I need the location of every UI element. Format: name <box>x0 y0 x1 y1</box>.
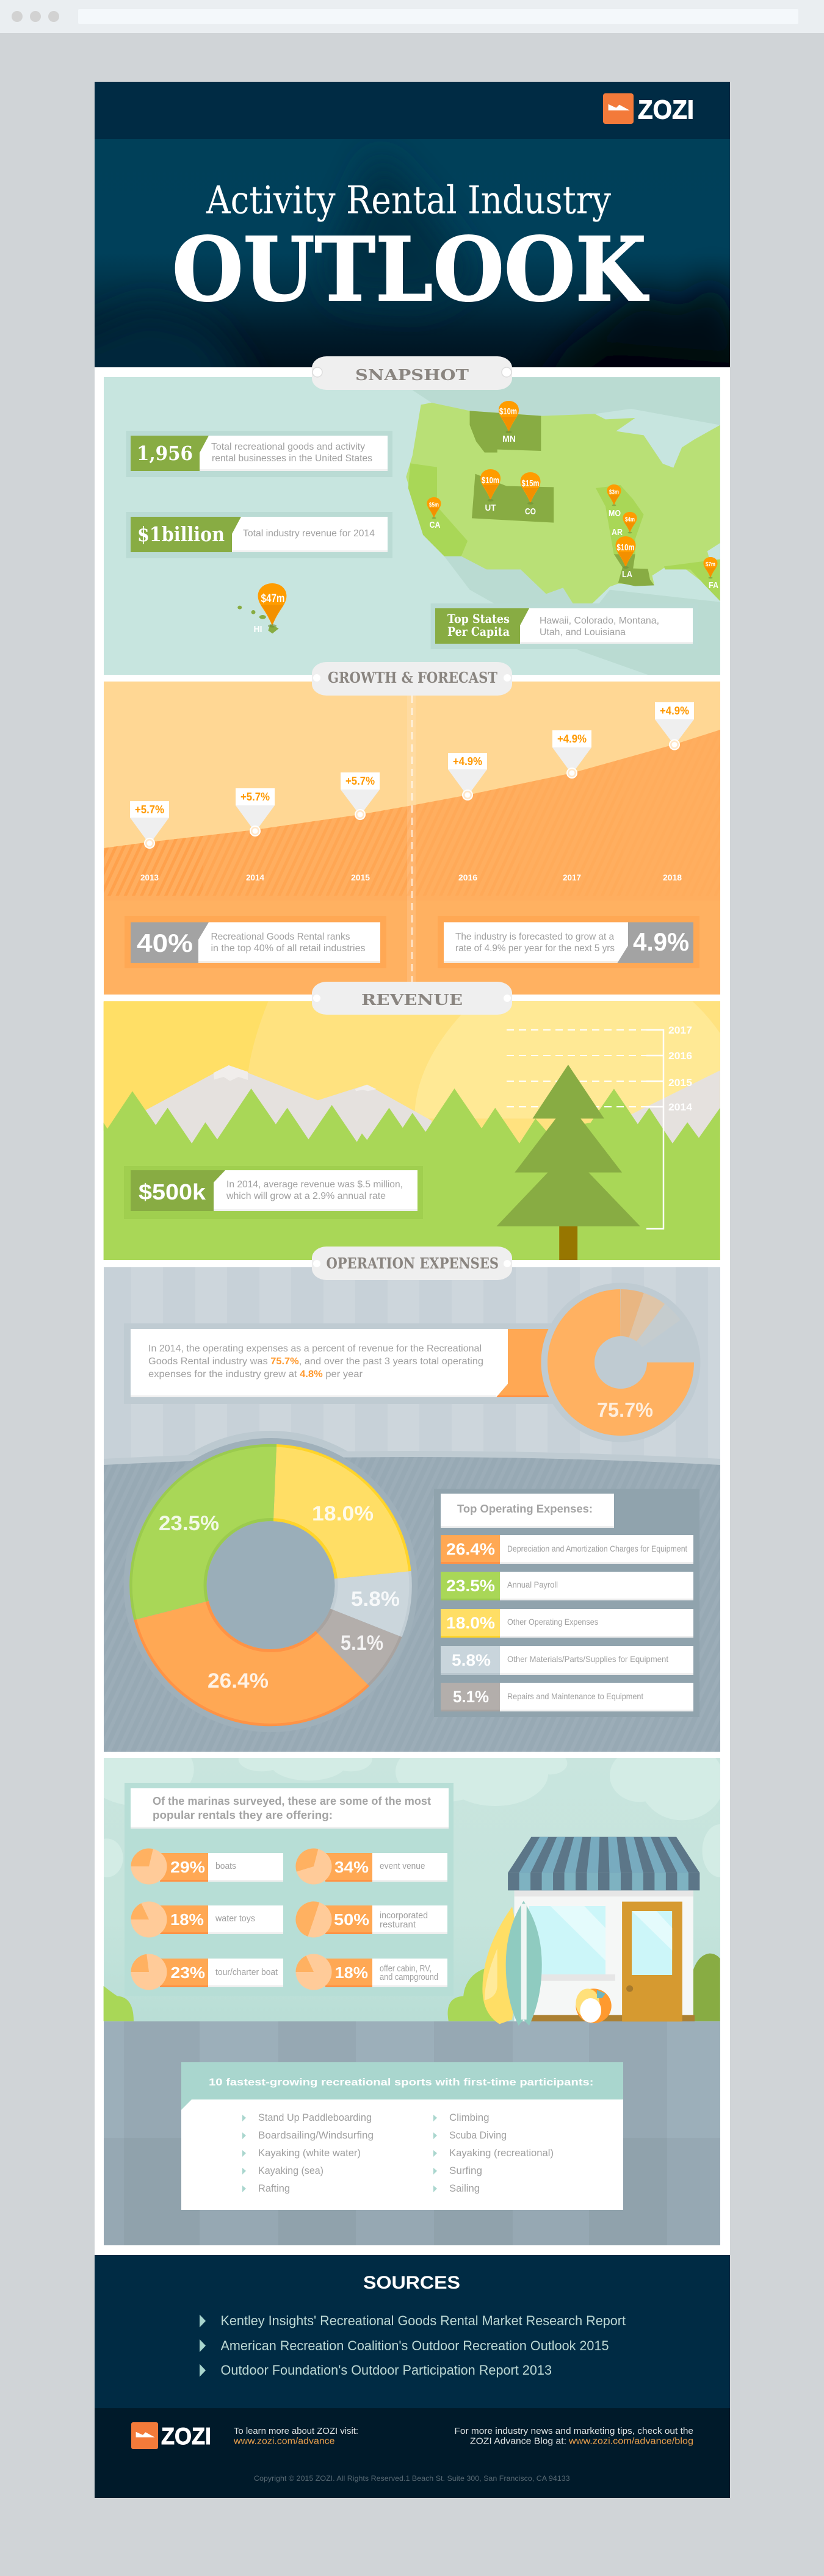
chart: 75.7% donut <box>541 1283 701 1442</box>
shop wall <box>515 1890 693 2021</box>
map pin: CO: CO <box>525 506 536 517</box>
footer right text: www.zozi.com/advance/blog <box>568 2436 693 2447</box>
donut labels: 5.1% <box>341 1632 383 1655</box>
map pin: LA: $10m <box>616 542 635 553</box>
stat: water toys 18%: 18% <box>170 1910 204 1929</box>
marker: 2017 <box>552 730 591 882</box>
legend row: 23.5%: 23.5% <box>446 1577 495 1595</box>
stat: cabin, RV, campground 18%: 18% <box>334 1963 368 1982</box>
map pin: AR <box>612 512 637 538</box>
teal surfboard <box>506 1901 542 2026</box>
callout: 40%: 40% <box>137 929 193 957</box>
illustration: bushes <box>104 1954 720 2021</box>
stat: tour/charter boat 23%: tour/charter boat <box>215 1967 278 1977</box>
section band: revenue <box>95 982 730 1015</box>
title OUTLOOK: OUTLOOK <box>172 218 649 321</box>
marker: 2014 <box>236 788 275 882</box>
callout: $500k: In 2014, average revenue was $.5 million, <box>226 1179 403 1190</box>
legend row: 23.5%: Annual Payroll <box>507 1580 558 1589</box>
source 3: Outdoor Foundation's Outdoor Participation Report 2013 <box>221 2362 552 2378</box>
callout: 1,956 businesses <box>126 431 392 477</box>
callout: 1,956 businesses: rental businesses in the United States <box>212 453 372 464</box>
sun rings <box>104 1001 720 1131</box>
callout: 4.9%: 4.9% <box>633 927 689 956</box>
shop fascia <box>515 1890 693 1896</box>
height scale: 2014 <box>668 1101 693 1113</box>
callout: 40% <box>125 916 386 968</box>
panel: snapshot <box>104 377 720 675</box>
map pin: MN: $10m <box>499 406 517 417</box>
map pin: MO: $3m <box>609 489 619 495</box>
legend row: 5.8%: 5.8% <box>452 1651 491 1669</box>
marker: 2015: 2015 <box>351 873 370 882</box>
marker: 2013 <box>130 801 169 882</box>
source 1: Kentley Insights' Recreational Goods Rental Market Research Report <box>221 2313 626 2328</box>
beach ball <box>576 1988 612 2023</box>
list right column: Sailing <box>449 2182 480 2194</box>
map pin: HI: $47m <box>261 592 284 605</box>
list right column: Surfing <box>449 2165 482 2176</box>
callout: top states per capita: Utah, and Louisiana <box>540 627 626 638</box>
marker: 2018: +4.9% <box>660 705 689 717</box>
marker: 2013: +5.7% <box>135 804 164 816</box>
segment: 5.1% <box>89 1404 452 1766</box>
list right column: Kayaking (recreational) <box>449 2147 554 2159</box>
road backdrop <box>104 2021 720 2245</box>
legend row: 5.1%: 5.1% <box>453 1688 489 1706</box>
logo wordmark: ZOZI <box>638 95 694 124</box>
callout: 40%: in the top 40% of all retail industries <box>211 943 365 954</box>
footer <box>95 2408 730 2498</box>
map pin: FA: FA <box>709 580 718 591</box>
stat: water toys 18%: water toys <box>215 1913 255 1924</box>
height scale: 2015 <box>668 1077 692 1088</box>
list right column: Scuba Diving <box>449 2129 507 2141</box>
callout: 40%: Recreational Goods Rental ranks <box>211 932 350 942</box>
heading: snapshot: SNAPSHOT <box>355 366 469 384</box>
list left column <box>258 2112 374 2194</box>
callout: 1,956 businesses: Total recreational goods and activity <box>211 442 365 452</box>
map pin: AR: $4m <box>625 516 635 523</box>
callout: $500k: $500k <box>139 1179 206 1204</box>
hero <box>95 139 730 367</box>
legend row: 5.1% <box>441 1683 693 1711</box>
callout: $500k <box>124 1166 423 1219</box>
map pin: CA <box>427 497 441 530</box>
card heading: popular rentals they are offering: <box>153 1809 333 1821</box>
segment: 26.4% <box>73 1387 468 1783</box>
list right column <box>449 2112 554 2194</box>
map pin: FA: $7m <box>706 561 715 568</box>
stat: event venue 34% <box>295 1849 447 1884</box>
legend row: 5.8% <box>441 1646 693 1675</box>
marker: 2015 <box>341 772 380 882</box>
list right column: Climbing <box>449 2112 490 2123</box>
marker: 2016: +4.9% <box>453 755 482 768</box>
forecast divider <box>407 691 416 990</box>
top navy header <box>95 82 730 139</box>
callout: $1billion: Total industry revenue for 2014 <box>243 528 375 539</box>
callout: top states per capita <box>431 603 698 649</box>
height scale <box>507 1024 693 1229</box>
callout: top states per capita: Hawaii, Colorado, Montana, <box>540 616 659 626</box>
map pin: UT: UT <box>485 503 496 513</box>
marker: 2016 <box>448 753 487 882</box>
legend title: Top Operating Expenses: <box>457 1503 593 1515</box>
callout: 4.9% <box>438 916 699 968</box>
donut halo <box>116 1431 425 1740</box>
hatch decoration <box>104 785 518 896</box>
map pin: HI: HI <box>254 624 262 635</box>
map pin: MN <box>499 401 519 444</box>
stat: water toys 18% <box>131 1901 283 1938</box>
section band: operation expenses <box>95 1247 730 1280</box>
map pin: CO: $15m <box>521 478 540 489</box>
legend row: 5.1%: Repairs and Maintenance to Equipment <box>507 1691 643 1701</box>
lower panel <box>104 1451 720 1752</box>
panel: sources <box>95 2255 730 2408</box>
legend row: 18.0%: 18.0% <box>446 1614 495 1632</box>
footer right text <box>454 2426 693 2447</box>
list left column: Kayaking (white water) <box>258 2147 361 2159</box>
legend row: 5.8%: Other Materials/Parts/Supplies for Equipment <box>507 1654 668 1664</box>
map pin: CO <box>520 472 541 517</box>
height scale: 2017 <box>668 1024 692 1036</box>
rental stats card <box>125 1783 454 1996</box>
stat: cabin, RV, campground 18%: offer cabin, RV, <box>380 1963 432 1974</box>
chart: 75.7% donut: 75.7% <box>597 1398 653 1421</box>
browser bar <box>0 0 824 33</box>
footer left text: www.zozi.com/advance <box>233 2436 334 2447</box>
heading: revenue: REVENUE <box>361 991 463 1009</box>
map pin: CA: CA <box>430 520 441 530</box>
map pin: LA <box>615 536 636 580</box>
panel: revenue <box>104 1001 720 1260</box>
footer left text: To learn more about ZOZI visit: <box>234 2426 358 2436</box>
callout: operating expense share: expenses for the industry grew at 4.8% per year <box>148 1369 363 1380</box>
map <box>237 377 720 675</box>
footer right text: For more industry news and marketing tips, check out the <box>454 2426 693 2436</box>
map pin: UT <box>480 469 501 513</box>
logo icon <box>603 93 634 124</box>
map pin: FA <box>703 557 718 591</box>
marker: 2014: +5.7% <box>240 791 270 803</box>
stat: boats 29%: boats <box>215 1861 236 1871</box>
map pin: MN: MN <box>502 434 516 444</box>
callout: 4.9%: rate of 4.9% per year for the next 5 yrs <box>455 943 615 954</box>
sources heading: SOURCES <box>363 2273 460 2293</box>
marker: 2017: +4.9% <box>557 733 587 745</box>
legend row: 18.0% <box>441 1609 693 1638</box>
heading: growth and forecast: GROWTH & FORECAST <box>328 669 497 686</box>
segment: 18.0% <box>125 1440 416 1730</box>
stat: boats 29% <box>131 1849 283 1884</box>
section band: snapshot <box>95 356 730 390</box>
callout: top states per capita: Top States <box>447 611 510 626</box>
tree <box>496 1065 640 1260</box>
stat: cabin, RV, campground 18% <box>295 1954 447 1990</box>
donut labels: 18.0% <box>312 1502 374 1525</box>
title line one: Activity Rental Industry <box>206 178 611 222</box>
source 2: American Recreation Coalition's Outdoor Recreation Outlook 2015 <box>221 2338 609 2353</box>
shop floor strip <box>529 2015 695 2021</box>
stat: incorporated resturant 50%: 50% <box>334 1910 369 1929</box>
shop window <box>529 1906 615 1981</box>
footer logo: ZOZI <box>161 2423 211 2450</box>
copyright: Copyright © 2015 ZOZI. All Rights Reserved.1 Beach St. Suite 300, San Francisco, CA 94133 <box>254 2474 570 2483</box>
height scale: 2016 <box>668 1050 692 1062</box>
list left column: Stand Up Paddleboarding <box>258 2112 372 2123</box>
stat: tour/charter boat 23%: 23% <box>171 1963 205 1982</box>
legend row: 26.4% <box>441 1535 693 1564</box>
list bullets <box>242 2115 437 2192</box>
segment: 23.5% <box>101 1416 441 1755</box>
legend row: 18.0%: Other Operating Expenses <box>507 1617 598 1627</box>
list left column: Boardsailing/Windsurfing <box>258 2129 374 2141</box>
white page frame <box>95 367 730 2255</box>
footer logo <box>131 2422 211 2450</box>
stat: cabin, RV, campground 18%: and campground <box>380 1972 438 1982</box>
growth curve area <box>104 730 720 995</box>
legend: top operating expenses <box>434 1489 699 1717</box>
segment: 5.8% <box>118 1432 424 1738</box>
donut labels <box>159 1502 400 1693</box>
legend title <box>441 1494 614 1528</box>
footer right text: ZOZI Advance Blog at: <box>470 2436 566 2447</box>
callout: top states per capita: Per Capita <box>447 624 510 639</box>
yellow surfboard <box>482 1907 521 2024</box>
list left column: Kayaking (sea) <box>258 2165 323 2176</box>
map pin: MO: MO <box>609 508 621 519</box>
card heading: Of the marinas surveyed, these are some of the most <box>153 1795 431 1807</box>
stat: boats 29%: 29% <box>170 1858 205 1876</box>
stat: tour/charter boat 23% <box>131 1954 283 1990</box>
donut labels: 23.5% <box>159 1512 219 1535</box>
stat: event venue 34%: 34% <box>334 1858 369 1876</box>
panel: fastest-growing sports <box>181 2062 623 2210</box>
marker: 2016: 2016 <box>458 873 477 882</box>
callout: operating expense share <box>124 1323 588 1404</box>
legend row: 26.4%: 26.4% <box>446 1540 495 1558</box>
panel: operation expenses <box>104 1267 720 1752</box>
footer left text <box>233 2426 358 2447</box>
marker: 2017: 2017 <box>563 873 581 882</box>
callout: operating expense share: In 2014, the operating expenses as a percent of revenue for the Recreational <box>148 1344 482 1354</box>
map pin: HI <box>254 583 286 635</box>
stat: incorporated resturant 50%: resturant <box>380 1919 416 1930</box>
stat: incorporated resturant 50% <box>295 1901 447 1938</box>
callout: operating expense share: Goods Rental industry was 75.7%, and over the past 3 years total operating <box>148 1356 483 1367</box>
callout: $500k: which will grow at a 2.9% annual rate <box>226 1191 386 1201</box>
awning <box>508 1837 699 1890</box>
card heading <box>131 1788 449 1829</box>
panel: growth and forecast <box>104 682 720 995</box>
marker: 2018: 2018 <box>663 873 682 882</box>
stat: incorporated resturant 50%: incorporated <box>380 1910 428 1921</box>
marker: 2015: +5.7% <box>345 775 375 787</box>
callout: 1,956 businesses: 1,956 <box>137 442 193 465</box>
legend row: 26.4%: Depreciation and Amortization Charges for Equipment <box>507 1544 687 1553</box>
shop door <box>622 1902 682 2021</box>
stat: event venue 34%: event venue <box>380 1861 425 1871</box>
tree line <box>104 1088 720 1260</box>
map pin: LA: LA <box>622 569 632 580</box>
clouds <box>104 1758 720 1877</box>
callout: 4.9%: The industry is forecasted to grow at a <box>455 932 614 942</box>
mountains <box>145 1065 720 1147</box>
map pin: MO <box>607 484 621 519</box>
marker: 2013: 2013 <box>140 873 159 882</box>
chart: top operating expenses donut <box>73 1387 468 1783</box>
callout: $1billion <box>126 512 392 558</box>
marker: 2018 <box>655 702 694 882</box>
section band: growth <box>95 662 730 696</box>
donut labels: 26.4% <box>208 1669 269 1693</box>
list heading text: 10 fastest-growing recreational sports with first-time participants: <box>209 2076 593 2088</box>
marker: 2014: 2014 <box>246 873 264 882</box>
callout: $1billion: $1billion <box>137 522 225 546</box>
list header <box>181 2062 623 2110</box>
map pin: UT: $10m <box>482 475 499 486</box>
panel: marina rentals <box>104 1758 720 2245</box>
map pin: CA: $5m <box>429 502 439 509</box>
list left column: Rafting <box>258 2182 290 2194</box>
heading: operation expenses: OPERATION EXPENSES <box>326 1254 499 1272</box>
map pin: AR: AR <box>612 527 623 538</box>
donut labels: 5.8% <box>351 1588 400 1611</box>
illustration: shop <box>482 1837 699 2026</box>
legend row: 23.5% <box>441 1572 693 1600</box>
